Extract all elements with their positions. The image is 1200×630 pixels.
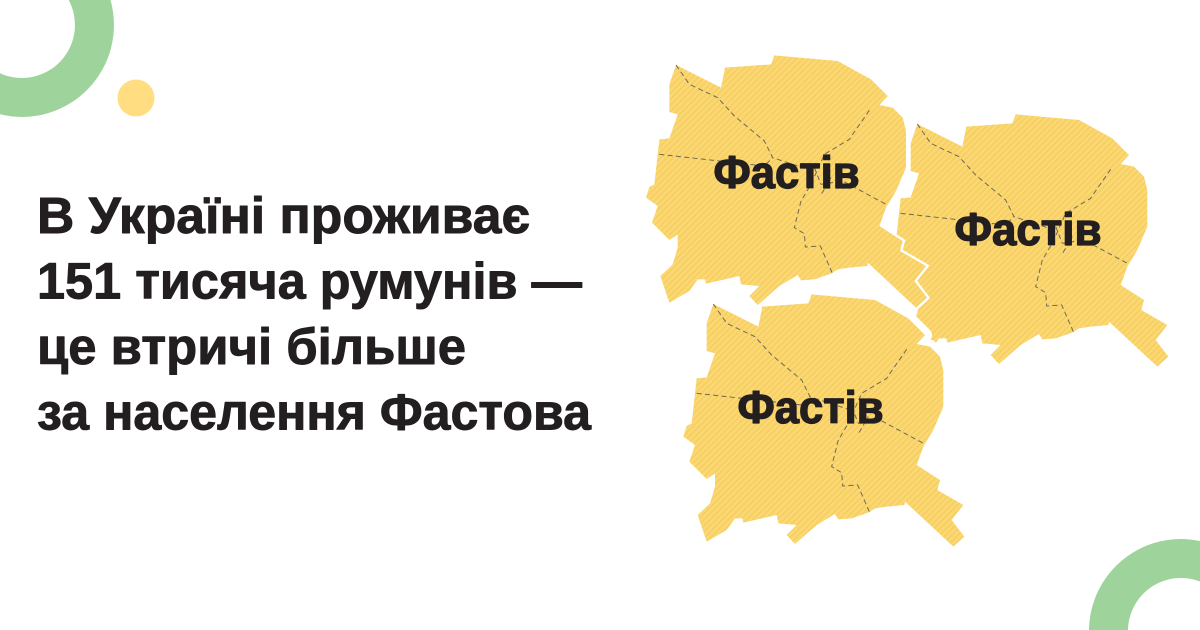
map: Fastiv bottom copy <box>683 294 964 547</box>
map: Fastiv right copy <box>887 114 1168 367</box>
map: Fastiv top copy <box>646 55 927 308</box>
label: right map: Фастів <box>954 204 1102 255</box>
title <box>37 187 592 440</box>
label: bottom map: Фастів <box>738 382 884 433</box>
title: за населення Фастова <box>37 384 592 440</box>
title: 151 тисяча румунів — <box>37 252 582 310</box>
decorative yellow dot <box>118 80 154 116</box>
decorative ring: top left <box>0 0 114 117</box>
label: top map: Фастів <box>714 147 860 198</box>
title: В Україні проживає <box>37 187 530 244</box>
title: це втричі більше <box>37 318 466 375</box>
decorative ring: bottom right <box>1089 539 1200 630</box>
